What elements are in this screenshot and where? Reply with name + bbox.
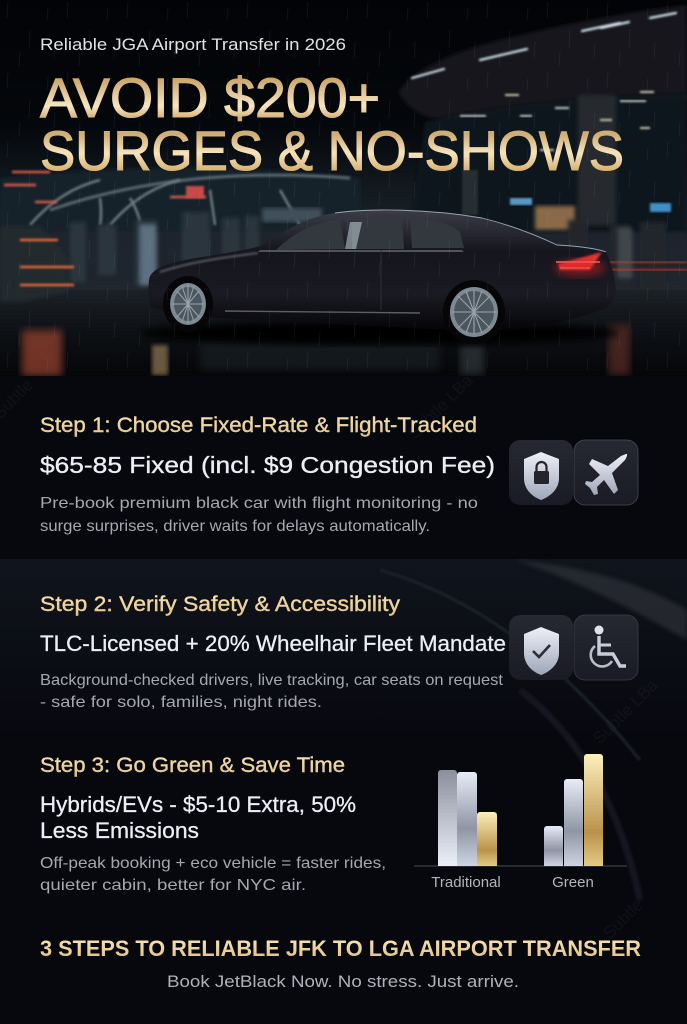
- ground reflections: [22, 325, 630, 376]
- wet ground: [0, 290, 687, 376]
- step 3 description: [40, 855, 386, 894]
- blurred car at left: [0, 226, 74, 302]
- step 3: [40, 753, 627, 894]
- step 2 description: [40, 672, 504, 711]
- step 2 description: - safe for solo, families, night rides.: [40, 694, 322, 711]
- chart label: traditional: Traditional: [431, 874, 501, 891]
- lower panel background: Subtle: [599, 895, 647, 943]
- step 1 heading: Step 1: Choose Fixed-Rate & Flight-Tracked: [40, 413, 477, 437]
- black sedan: [140, 210, 620, 345]
- step 3 heading: Step 3: Go Green & Save Time: [40, 753, 345, 777]
- car windows: [276, 218, 464, 250]
- step 1 price line: $65-85 Fixed (incl. $9 Congestion Fee): [40, 452, 495, 478]
- lower panel background: Subtle LBa: [404, 370, 477, 443]
- hero title: [40, 66, 624, 182]
- icon: shield with check: [509, 615, 573, 680]
- step 3 hybrid line: Less Emissions: [40, 818, 199, 843]
- left terminal structures: [0, 168, 671, 232]
- step 3 hybrid line: Hybrids/EVs - $5-10 Extra, 50%: [40, 792, 356, 817]
- step 2 heading: Step 2: Verify Safety & Accessibility: [40, 592, 400, 616]
- step 1 description: Pre-book premium black car with flight monitoring - no: [40, 495, 478, 512]
- hero subtitle: Reliable JGA Airport Transfer in 2026: [40, 36, 346, 54]
- hero title: SURGES & NO-SHOWS: [40, 119, 624, 182]
- step 1 description: surge surprises, driver waits for delays automatically.: [40, 518, 430, 535]
- hero title: AVOID $200+: [40, 66, 380, 129]
- footer call to action: Book JetBlack Now. No stress. Just arrive.: [167, 972, 519, 991]
- step 3 description: Off-peak booking + eco vehicle = faster rides,: [40, 855, 386, 872]
- icon: airplane: [574, 440, 638, 505]
- step 3 description: quieter cabin, better for NYC air.: [40, 877, 306, 894]
- lower panel background: [0, 370, 687, 1024]
- blurred crowd: [0, 212, 687, 307]
- step 3 hybrid line: [40, 792, 356, 843]
- icon: wheelchair: [574, 615, 638, 680]
- chart label: green: Green: [552, 874, 594, 891]
- step 2: [40, 592, 638, 711]
- wheels: [163, 276, 505, 344]
- red light trails: [608, 262, 687, 270]
- step 1: [40, 413, 638, 535]
- terminal canopy: [398, 5, 687, 235]
- step 1 description: [40, 495, 478, 535]
- step 2 license line: TLC-Licensed + 20% Wheelhair Fleet Mandate: [40, 631, 506, 656]
- step 2 description: Background-checked drivers, live tracking, car seats on request: [40, 672, 504, 689]
- bar chart: traditional vs green: [414, 754, 627, 891]
- lower panel background: Subtle LBa: [589, 675, 662, 748]
- footer headline: 3 STEPS TO RELIABLE JFK TO LGA AIRPORT TRANSFER: [40, 936, 641, 961]
- icon: shield with lock: [509, 440, 573, 505]
- rain overlay: [0, 0, 687, 376]
- hero photo: rainy airport terminal: [0, 0, 687, 376]
- tail light: [558, 252, 602, 270]
